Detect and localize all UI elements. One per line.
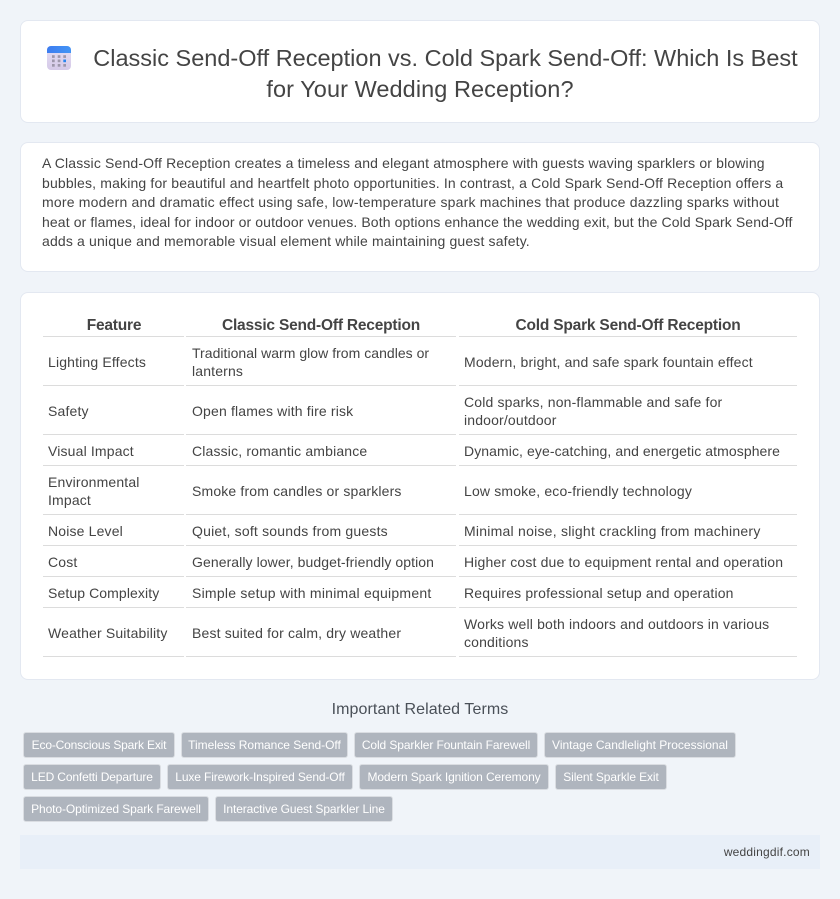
panel: introduction card — [20, 142, 820, 272]
text block: introduction: adds a unique and memorable visual element while maintaining guest safety. — [42, 233, 530, 249]
row: setup complexity: Simple setup with minimal equipment — [192, 585, 432, 601]
row: safety: Safety — [48, 403, 89, 419]
comparison table: Classic Send-Off Reception — [222, 317, 420, 334]
row: visual impact: Visual Impact — [48, 443, 134, 459]
row: environmental impact: Low smoke, eco-friendly technology — [464, 483, 692, 499]
row: environmental impact: Environmental — [48, 474, 140, 490]
comparison table: Feature — [87, 317, 141, 334]
row: weather suitability: Weather Suitability — [48, 625, 168, 641]
row: lighting effects: Lighting Effects — [48, 354, 146, 370]
footer source text: weddingdif.com — [724, 845, 810, 859]
row: lighting effects: Modern, bright, and safe spark fountain effect — [464, 354, 753, 370]
row: weather suitability: Best suited for calm, dry weather — [192, 625, 401, 641]
tags: related terms: Timeless Romance Send-Off — [188, 738, 341, 752]
title — [93, 45, 798, 102]
row: cost: Generally lower, budget-friendly option — [192, 554, 434, 570]
row: visual impact — [48, 443, 780, 459]
row: noise level — [48, 523, 761, 539]
heading: important related terms: Important Related Terms — [332, 701, 508, 718]
row: lighting effects: Traditional warm glow from candles or — [192, 345, 429, 361]
tags: related terms — [23, 732, 736, 822]
tags: related terms: Luxe Firework-Inspired Send-Off — [175, 770, 345, 784]
row: setup complexity — [48, 585, 734, 601]
panel: comparison table card — [20, 292, 820, 680]
row: weather suitability: conditions — [464, 634, 529, 650]
row: setup complexity: Requires professional setup and operation — [464, 585, 734, 601]
tags: related terms: Vintage Candlelight Processional — [552, 738, 728, 752]
row: safety: Open flames with fire risk — [192, 403, 353, 419]
row: noise level: Quiet, soft sounds from guests — [192, 523, 388, 539]
text block: introduction: more modern and dramatic effect using safe, low-temperature spark machines that produce dazzling sparks without — [42, 194, 779, 210]
tags: related terms: Photo-Optimized Spark Farewell — [31, 802, 201, 816]
row: visual impact: Classic, romantic ambiance — [192, 443, 367, 459]
row: safety: indoor/outdoor — [464, 412, 557, 428]
tags: related terms: Modern Spark Ignition Ceremony — [367, 770, 541, 784]
tags: related terms: Silent Sparkle Exit — [563, 770, 659, 784]
text block: introduction — [42, 155, 793, 249]
text block: introduction: A Classic Send-Off Reception creates a timeless and elegant atmosphere with guests waving sparklers or blowing — [42, 155, 765, 171]
row: environmental impact: Impact — [48, 492, 91, 508]
row: noise level: Minimal noise, slight crackling from machinery — [464, 523, 761, 539]
row: safety: Cold sparks, non-flammable and safe for — [464, 394, 722, 410]
row: weather suitability — [48, 616, 769, 650]
row: lighting effects: lanterns — [192, 363, 243, 379]
row: setup complexity: Setup Complexity — [48, 585, 159, 601]
comparison table: Cold Spark Send-Off Reception — [516, 317, 740, 334]
row: cost: Cost — [48, 554, 77, 570]
text block: introduction: heat or flames, ideal for indoor or outdoor venues. Both options enhance the wedding exit, but the Cold Spark Send-Off — [42, 214, 793, 230]
tags: related terms: Cold Sparkler Fountain Farewell — [362, 738, 530, 752]
row: cost: Higher cost due to equipment rental and operation — [464, 554, 783, 570]
tags: related terms: Eco-Conscious Spark Exit — [32, 738, 166, 752]
tags: related terms: LED Confetti Departure — [31, 770, 153, 784]
tags: related terms: Interactive Guest Sparkler Line — [223, 802, 385, 816]
row: lighting effects — [48, 345, 753, 379]
row: cost — [48, 554, 783, 570]
row: environmental impact — [48, 474, 692, 508]
comparison table — [43, 317, 797, 657]
footer bar — [20, 835, 820, 869]
row: visual impact: Dynamic, eye-catching, and energetic atmosphere — [464, 443, 780, 459]
text block: introduction: bubbles, making for beautiful and heartfelt photo opportunities. In contrast, a Cold Spark Send-Off Reception offers a — [42, 175, 783, 191]
row: safety — [48, 394, 722, 428]
title: for Your Wedding Reception? — [266, 76, 574, 102]
title: Classic Send-Off Reception vs. Cold Spark Send-Off: Which Is Best — [93, 45, 798, 71]
panel: title card — [20, 20, 820, 123]
row: noise level: Noise Level — [48, 523, 123, 539]
row: weather suitability: Works well both indoors and outdoors in various — [464, 616, 769, 632]
row: environmental impact: Smoke from candles or sparklers — [192, 483, 402, 499]
icon: calendar — [47, 46, 71, 70]
